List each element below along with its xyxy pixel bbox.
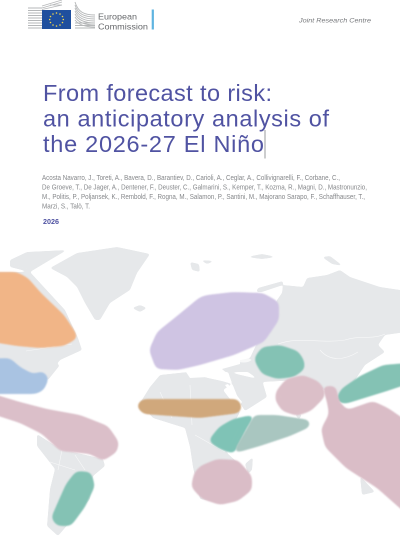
title: From forecast to risk: [43,80,272,106]
region: pink Americas [0,390,119,461]
year: 2026 [43,219,59,226]
region: teal South America [51,471,95,526]
region: pink Southern Africa [191,459,252,505]
icon: EU flag [42,10,71,29]
authors: Marzi, S., Talò, T. [42,204,90,210]
region: orange North America [0,272,78,348]
map: land masses [0,247,400,536]
authors: M., Politis, P., Poljansek, K., Rembold, F., Rogna, M., Salamon, P., Santini, M., Majorano Sarapo, F., Schaffhauser, T., [42,194,365,201]
authors: De Groeve, T., De Jager, A., Dentener, F., Deuster, C., Galmarini, S., Kemper, T., Kozma, R., Magni, D., Mastronunzio, [42,184,367,192]
map: internal borders and seas [26,334,385,470]
logo wordmark: Commission [98,22,148,32]
region: pink Indo-Pacific [321,386,400,526]
icon: building left [28,0,62,28]
region: brown Sahel [136,399,242,418]
region: teal East Africa [208,414,256,454]
icon: building right [75,2,95,28]
title: the 2026-27 El Niño [43,131,264,157]
title: an anticipatory analysis of [43,106,329,132]
region: teal Central Asia [254,345,305,379]
region: teal Southeast Asia [335,362,400,404]
region: grey-green Arabian Sea [232,415,310,454]
title [43,80,329,157]
authors [42,175,367,210]
authors: Acosta Navarro, J., Toreti, A., Bavera, D., Barantiev, D., Carioli, A., Ceglar, A., Collivignarelli, F., Corbane, C., [42,175,340,182]
text cursor [264,130,266,158]
region: pink Middle East [275,375,325,416]
region: purple Europe and Atlantic [149,292,279,370]
logo blue bar [152,10,154,30]
organisation name: Joint Research Centre [298,18,371,24]
map: Red Sea [225,384,242,405]
world map [0,247,400,536]
map: Mediterranean Sea [186,360,240,381]
logo wordmark [98,12,148,32]
logo wordmark: European [98,12,137,22]
region: blue North America [0,358,49,394]
logo: European Commission [28,0,154,32]
